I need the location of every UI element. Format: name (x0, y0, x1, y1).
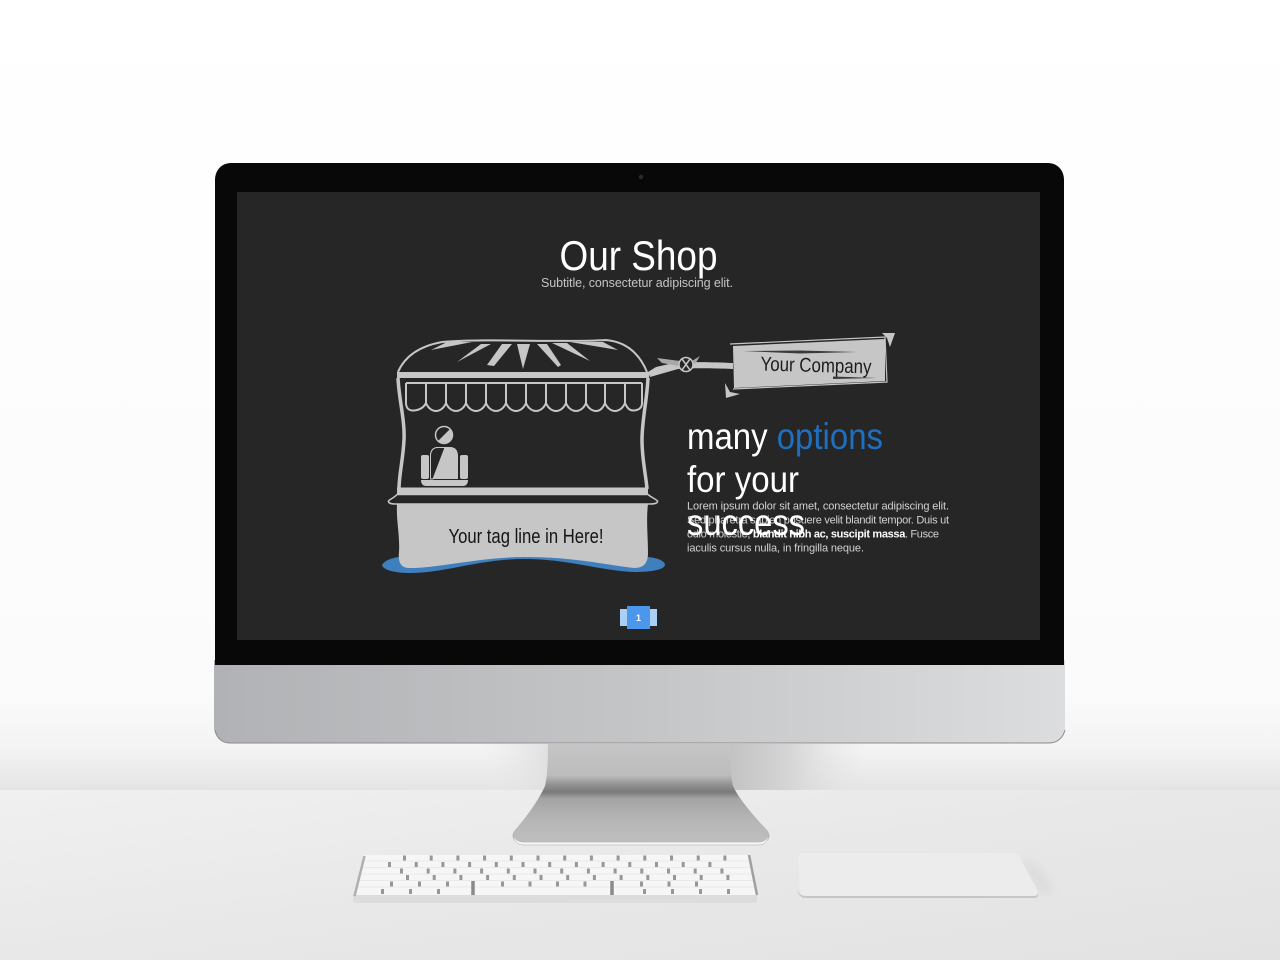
chin bottom edge (215, 730, 1065, 743)
keyboard row lines (356, 861, 756, 887)
desk (421, 480, 468, 486)
body paragraph (687, 500, 949, 554)
monitor stand (513, 744, 769, 845)
head (436, 426, 452, 444)
body paragraph: iaculis cursus nulla, in fringilla neque. (687, 542, 864, 554)
roof sunburst (431, 342, 618, 369)
headline line 2: for your (687, 459, 799, 500)
monitor chin (214, 660, 1065, 743)
sign lower brush mark (833, 376, 877, 379)
body paragraph: Sed pharetra sapien posuere velit blandit tempor. Duis ut (687, 514, 949, 526)
sign bottom arrow (725, 383, 740, 398)
monitor (214, 163, 1065, 743)
tag line: Your tag line in Here! (448, 526, 604, 548)
subtitle: Subtitle, consectetur adipiscing elit. (541, 276, 733, 290)
person icon (421, 426, 468, 486)
arms (421, 455, 429, 479)
keyboard space bar gaps (473, 881, 612, 895)
arm tuft (657, 356, 700, 366)
headline line 3: success (687, 502, 805, 543)
sign board (733, 339, 885, 388)
awning scallops (406, 383, 642, 411)
camera (639, 175, 643, 179)
shop frame (398, 378, 648, 489)
monitor bezel (215, 163, 1064, 665)
stand shadow right (728, 744, 868, 790)
keyboard (353, 855, 757, 903)
sign outline (730, 337, 887, 389)
keyboard key gaps (381, 858, 740, 892)
sign brush marks (743, 350, 857, 354)
body (430, 447, 458, 479)
trackpad (797, 853, 1054, 898)
shop illustration (388, 340, 658, 568)
blue puddle (382, 557, 665, 573)
desk surface (0, 790, 1280, 960)
page number badge (620, 606, 657, 629)
sign arm (648, 362, 733, 377)
roof outline (398, 340, 647, 372)
roof band (397, 372, 649, 378)
title: Our Shop (560, 232, 718, 279)
counter top (397, 488, 648, 494)
headline: many options (687, 416, 883, 457)
body paragraph: Lorem ipsum dolor sit amet, consectetur adipiscing elit. (687, 500, 949, 512)
sign top arrow (882, 333, 895, 347)
tag panel (397, 504, 648, 568)
company sign (648, 333, 895, 398)
stand shadow left (480, 744, 548, 790)
counter ledge (388, 494, 658, 504)
sign joint (679, 358, 693, 372)
body paragraph: odio molestie, blandit nibh ac, suscipit massa. Fusce (687, 528, 939, 540)
slide screen (237, 192, 1040, 640)
page number badge: 1 (636, 613, 641, 623)
sign label: Your Company (760, 354, 872, 378)
